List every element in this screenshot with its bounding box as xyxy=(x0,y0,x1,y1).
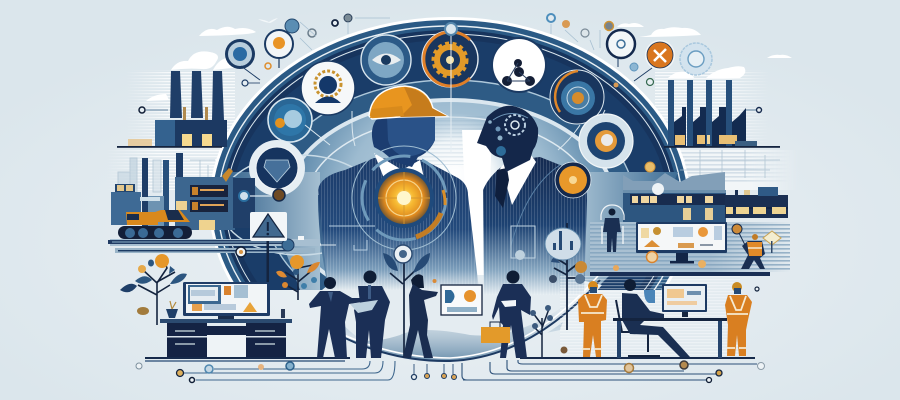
icon: machinery xyxy=(579,114,633,168)
person with hard hat xyxy=(318,86,479,290)
businessman with tablet xyxy=(350,270,390,358)
building right xyxy=(623,162,726,222)
icon: clock ring xyxy=(607,30,635,67)
desk xyxy=(160,319,292,323)
worker in orange hi-vis xyxy=(578,281,607,357)
circular icons inside the dome xyxy=(249,23,633,245)
office chair xyxy=(616,300,650,332)
computer desk xyxy=(160,282,292,359)
office desk with monitor xyxy=(613,284,727,358)
icon: atom node xyxy=(225,39,260,80)
icon: orange tool badge xyxy=(634,40,675,81)
large dashboard monitor xyxy=(613,222,727,271)
orbiting icons outside the dome xyxy=(139,14,762,113)
monitor xyxy=(183,282,270,316)
businessman with arms on hip xyxy=(309,277,362,358)
worker in orange right xyxy=(725,282,759,356)
icon: orange hub xyxy=(555,162,591,198)
woman presenting xyxy=(403,274,438,358)
faint skyline lines left and right xyxy=(118,150,780,192)
icon: eye xyxy=(361,35,411,85)
central plant xyxy=(383,245,430,357)
road worker with sign xyxy=(732,224,781,269)
orange hard hat xyxy=(369,86,447,119)
striped haze behind factories xyxy=(105,70,800,190)
businessman with briefcase xyxy=(481,270,531,358)
icon: person head xyxy=(301,61,355,115)
suit body xyxy=(318,158,479,290)
standing worker in scanner xyxy=(601,205,624,252)
warning sign xyxy=(250,212,287,296)
dome arch xyxy=(211,17,688,290)
lower left and right flanks of dome xyxy=(220,130,678,345)
factory middle left xyxy=(111,153,285,233)
small bar chart bubble xyxy=(511,226,581,260)
connector lines xyxy=(305,110,605,245)
icon: light blue ring xyxy=(680,43,712,75)
icon: blue brain xyxy=(268,98,312,142)
seated man at computer xyxy=(616,279,690,357)
middle right scene lines and stripes xyxy=(560,222,790,356)
conveyor road left xyxy=(108,236,320,257)
white shirt xyxy=(499,155,536,205)
person with AI brain xyxy=(477,106,587,295)
small nodes left xyxy=(139,14,390,113)
clouds and birds xyxy=(146,18,792,101)
head xyxy=(372,116,435,167)
white collar xyxy=(374,153,424,187)
profile head xyxy=(477,106,538,172)
inner glowing core xyxy=(276,81,628,290)
dark suit xyxy=(483,157,587,295)
icon: network xyxy=(491,37,547,93)
small nodes right xyxy=(547,14,762,112)
small plant near workers xyxy=(530,305,568,357)
bowl of the central scene xyxy=(322,275,602,362)
display panels xyxy=(190,185,228,197)
right tree xyxy=(549,223,587,330)
gears in head xyxy=(505,115,525,135)
presentation board xyxy=(441,285,482,315)
icon: gear xyxy=(422,23,478,153)
infographic scene xyxy=(108,13,792,384)
glowing chest emblem xyxy=(329,146,456,250)
icon: orange blue gear xyxy=(550,70,604,124)
icon: orange badge xyxy=(265,30,293,68)
lit windows xyxy=(182,134,192,146)
tracked vehicle xyxy=(118,210,192,239)
orange tag xyxy=(222,168,233,182)
tree right of warning sign xyxy=(276,255,320,300)
orange briefcase xyxy=(481,327,510,343)
icon: diamond xyxy=(249,140,305,196)
tree left of desk xyxy=(120,254,187,325)
tie xyxy=(495,168,509,208)
factory far right xyxy=(725,187,788,218)
factory top right xyxy=(664,80,780,148)
floor and circuit lines xyxy=(136,358,764,382)
factory top left xyxy=(117,71,227,148)
speaker xyxy=(281,309,285,318)
plant pot xyxy=(166,309,178,318)
